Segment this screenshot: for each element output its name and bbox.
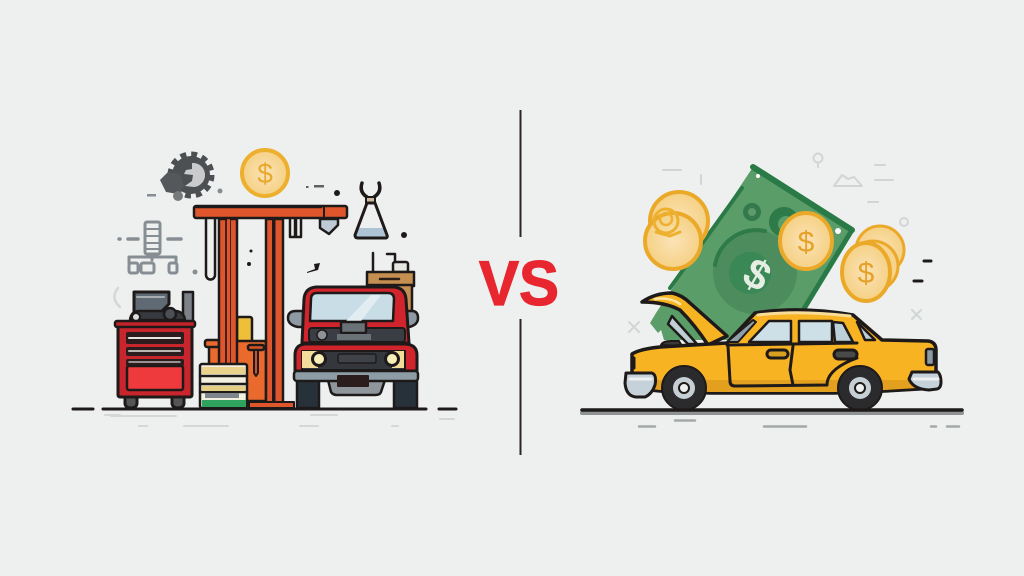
panel: car and money [582,154,962,426]
center divider bottom [520,319,522,455]
chest wheels [125,398,184,408]
road line [582,410,962,413]
icon: top coin: $ [257,158,273,189]
car body [632,310,936,393]
brown cabinet behind truck [367,253,414,315]
sill shading [650,380,934,392]
road shadow marks [639,420,959,426]
icon: top coin [242,150,288,196]
stacked boxes [200,364,247,408]
VS label: VS [479,249,559,319]
tools on top of chest [130,292,193,322]
roof highlight [758,313,850,316]
workshop floating marks [147,185,407,274]
coin center: $ [798,226,815,259]
yellow sedan [625,293,941,410]
coin stack right [842,226,904,301]
coin cluster left [645,192,708,269]
icon: grey hoist schematic [119,222,181,273]
faint background icons [629,154,921,332]
lift posts and beam [194,206,347,408]
banknote [650,167,852,340]
coin stack right: $ [858,257,875,290]
banknote: $ [735,248,779,301]
left floor shadow marks [105,415,454,426]
dash marks [914,261,931,281]
rear wheel [838,366,882,410]
panel: repair shop [73,150,456,426]
open hood [642,293,727,346]
windows [727,320,875,342]
bumpers and lights [625,349,941,397]
center divider top [520,110,522,237]
icon: gear [160,154,212,201]
icon: hanging hook [354,183,387,238]
red tool chest [114,288,195,408]
lift back bench [205,317,266,401]
faint arc beside chest [114,288,120,307]
doors and handles [727,343,857,386]
coin center [780,213,832,269]
left floor line [73,408,456,410]
front wheel [662,366,706,410]
red pickup truck [288,287,418,408]
